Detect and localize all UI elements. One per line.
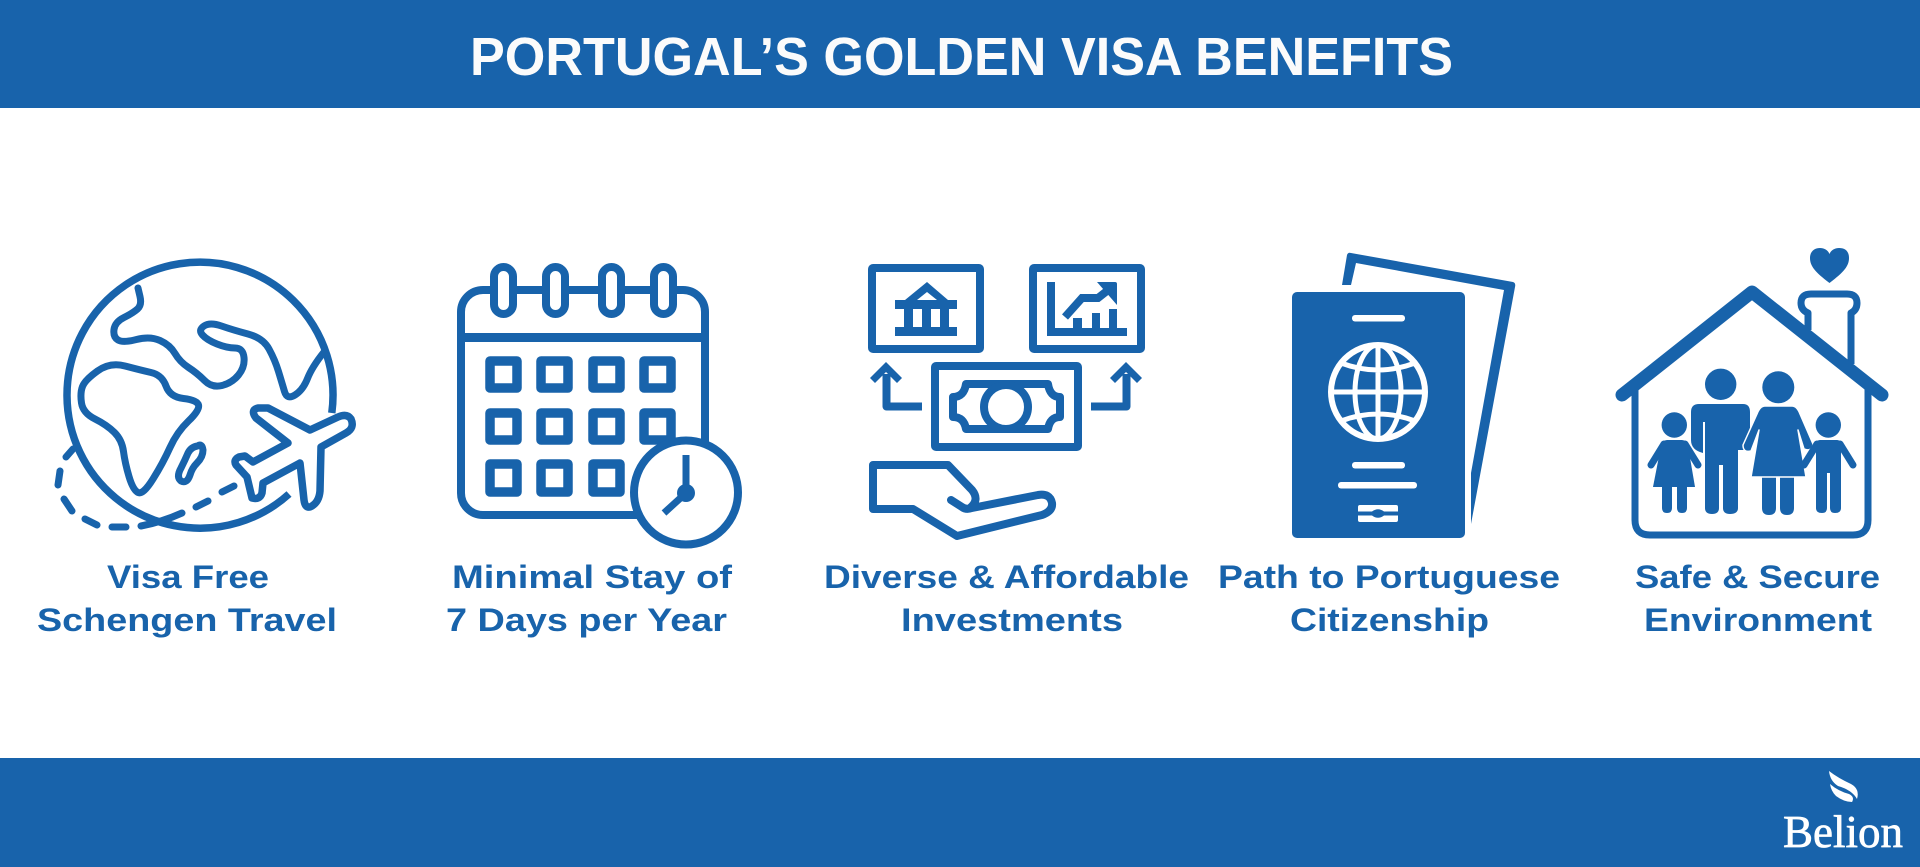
icon: family in house bbox=[1622, 248, 1882, 535]
label: diverse investments bbox=[824, 559, 1189, 638]
label: path to citizenship: Path to Portuguese bbox=[1218, 559, 1560, 595]
label: diverse investments: Diverse & Affordable bbox=[824, 559, 1189, 595]
label: visa free schengen travel bbox=[37, 559, 337, 638]
label: path to citizenship: Citizenship bbox=[1290, 602, 1489, 638]
label: visa free schengen travel: Visa Free bbox=[107, 559, 269, 595]
label: safe and secure: Safe & Secure bbox=[1635, 559, 1880, 595]
label: safe and secure: Environment bbox=[1644, 602, 1872, 638]
footer band bbox=[0, 758, 1920, 867]
label: visa free schengen travel: Schengen Travel bbox=[37, 602, 337, 638]
panel: visa free schengen travel bbox=[37, 262, 352, 638]
icon: globe with plane bbox=[58, 262, 352, 528]
arrow: left up bbox=[870, 362, 922, 406]
icon: calendar with clock bbox=[457, 267, 738, 544]
logo: belion bbox=[1783, 771, 1903, 857]
icon: banknote bbox=[935, 366, 1078, 447]
figure: boy bbox=[1804, 412, 1853, 513]
label: minimal stay bbox=[446, 559, 732, 638]
figure: man bbox=[1691, 369, 1750, 514]
title: PORTUGAL’S GOLDEN VISA BENEFITS bbox=[470, 27, 1453, 87]
label: minimal stay: Minimal Stay of bbox=[452, 559, 732, 595]
label: minimal stay: 7 Days per Year bbox=[446, 602, 727, 638]
panel: citizenship bbox=[1218, 253, 1560, 638]
label: path to citizenship bbox=[1218, 559, 1560, 638]
arrow: right up bbox=[1091, 362, 1142, 406]
icon: bank box bbox=[872, 268, 980, 349]
icon: open hand bbox=[873, 465, 1052, 536]
icon: investments bbox=[870, 268, 1142, 536]
label: safe and secure bbox=[1635, 559, 1880, 638]
icon: growth chart box bbox=[1033, 268, 1141, 349]
figure: woman bbox=[1743, 371, 1813, 515]
panel: investments bbox=[824, 268, 1189, 638]
header band bbox=[0, 0, 1920, 108]
logo: belion: Belion bbox=[1783, 806, 1903, 857]
panel: safe and secure bbox=[1622, 248, 1882, 638]
label: diverse investments: Investments bbox=[901, 602, 1123, 638]
panel: minimal stay bbox=[446, 267, 738, 638]
figure: girl bbox=[1651, 412, 1698, 513]
icon: passport bbox=[1292, 253, 1515, 538]
